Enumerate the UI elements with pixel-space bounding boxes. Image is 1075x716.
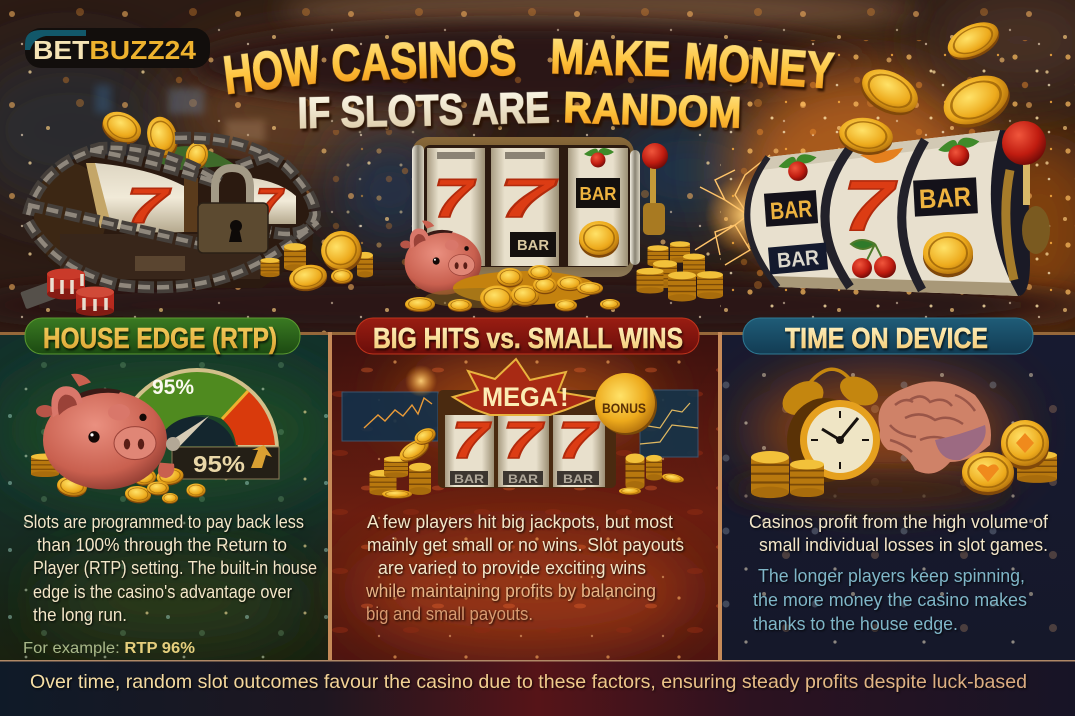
illustration: mega slot machine: 7	[558, 412, 599, 470]
mega burst: MEGA	[482, 382, 558, 412]
padlock	[198, 168, 268, 253]
charts	[342, 390, 698, 457]
reel symbols: BAR	[918, 182, 972, 214]
text: big hits description: A few players hit big jackpots, but most	[367, 512, 673, 532]
footer band	[0, 660, 1075, 716]
heading: time on device: TIME ON DEVICE	[785, 323, 988, 355]
footer text: Over time, random slot outcomes favour the casino due to these factors, ensuring steady profits despite luck-based	[30, 671, 1027, 693]
illustration: mega slot machine: 7	[452, 412, 491, 470]
background: casino scene	[0, 0, 1075, 333]
illustration: mega slot machine: BAR	[508, 472, 538, 486]
mega burst: !	[560, 382, 569, 412]
coin pile	[405, 241, 723, 312]
title	[220, 29, 836, 138]
lever	[642, 143, 668, 235]
title: RANDOM	[563, 83, 742, 138]
text: big hits description: while maintaining profits by balancing	[365, 581, 656, 601]
text: house edge description: than 100% through the Return to	[37, 535, 287, 555]
piggy bank	[400, 221, 486, 295]
cap and lever	[991, 121, 1050, 296]
lightning	[695, 155, 785, 265]
coin pile	[260, 225, 373, 294]
title: IF SLOTS ARE	[297, 83, 550, 138]
text: example: For example: RTP 96%	[23, 640, 195, 657]
flying coins	[837, 15, 1017, 158]
illustration: gauge needle	[166, 416, 209, 451]
text: house edge description: Slots are programmed to pay back less	[23, 512, 304, 532]
text: time on device description: the more money the casino makes	[753, 590, 1027, 610]
text: house edge description: edge is the casino's advantage over	[33, 582, 292, 602]
illustration: brain	[878, 381, 991, 474]
heading: big hits vs small wins: BIG HITS vs. SMALL WINS	[373, 323, 683, 355]
illustration: mega slot machine: 7	[502, 412, 544, 470]
chains	[28, 138, 318, 287]
reel symbols: BAR	[776, 246, 820, 273]
text: time on device description	[749, 512, 1049, 634]
illustration: coins and stacks	[751, 420, 1057, 498]
text: house edge description	[23, 512, 317, 625]
illustration: gauge	[115, 368, 279, 479]
text: big hits description	[365, 512, 684, 624]
logo: BetBuzz24	[25, 28, 210, 68]
illustration: mega slot machine: BAR	[454, 472, 484, 486]
mega burst	[453, 359, 595, 415]
reel symbols: BAR	[769, 195, 813, 225]
panel: time on device	[722, 334, 1075, 661]
illustration: chained slot machine	[20, 106, 373, 316]
illustration: mega slot machine	[405, 359, 657, 488]
reel symbols: 7	[842, 167, 898, 246]
illustration: coins under piggy	[31, 454, 206, 504]
bonus coin: BONUS	[602, 400, 646, 416]
text: big hits description: big and small payouts.	[366, 604, 533, 624]
panel: big hits	[332, 334, 718, 661]
logo: BetBuzz24: BETBUZZ24	[33, 35, 197, 65]
illustration: piggy bank	[36, 374, 174, 489]
coins and cash on top of chest	[97, 106, 235, 172]
text: time on device description: Casinos profit from the high volume of	[749, 512, 1049, 532]
heading: house edge: HOUSE EDGE (RTP)	[43, 323, 277, 355]
title: CASINOS	[330, 29, 517, 92]
title: MONEY	[682, 32, 836, 99]
text: house edge description: the long run.	[33, 605, 127, 625]
reel symbols	[764, 136, 982, 278]
illustration: mega slot machine: BAR	[563, 472, 593, 486]
illustration: gauge: 95%	[152, 376, 194, 399]
title: HOW	[220, 35, 324, 106]
panel: house edge	[0, 334, 340, 661]
illustration: alarm clock	[776, 369, 883, 482]
illustration: slot machine with piggy bank: 7	[498, 167, 558, 229]
panel dividers	[0, 332, 1075, 661]
illustration: gauge: 95%	[193, 451, 245, 477]
illustration: slot machine with piggy bank: BAR	[580, 184, 616, 204]
illustration: slot machine with piggy bank: 7	[433, 167, 476, 229]
illustration: chained slot machine: 7	[256, 180, 285, 228]
illustration: chained slot machine: 7	[126, 178, 171, 234]
poker chips	[20, 268, 114, 316]
text: house edge description: Player (RTP) setting. The built-in house	[33, 558, 317, 578]
text: time on device description: thanks to the house edge.	[753, 614, 958, 634]
text: time on device description: small individual losses in slot games.	[759, 535, 1048, 555]
title: MAKE	[550, 30, 671, 87]
bonus coin	[595, 373, 657, 435]
illustration: coin stacks	[370, 425, 685, 499]
text: big hits description: are varied to provide exciting wins	[378, 558, 646, 578]
illustration: slot machine with piggy bank	[400, 137, 723, 312]
illustration: spinning reels with flying coins	[695, 15, 1050, 296]
text: time on device description: The longer players keep spinning,	[758, 566, 1025, 586]
text: big hits description: mainly get small or no wins. Slot payouts	[367, 535, 684, 555]
illustration: slot machine with piggy bank: BAR	[517, 237, 549, 254]
